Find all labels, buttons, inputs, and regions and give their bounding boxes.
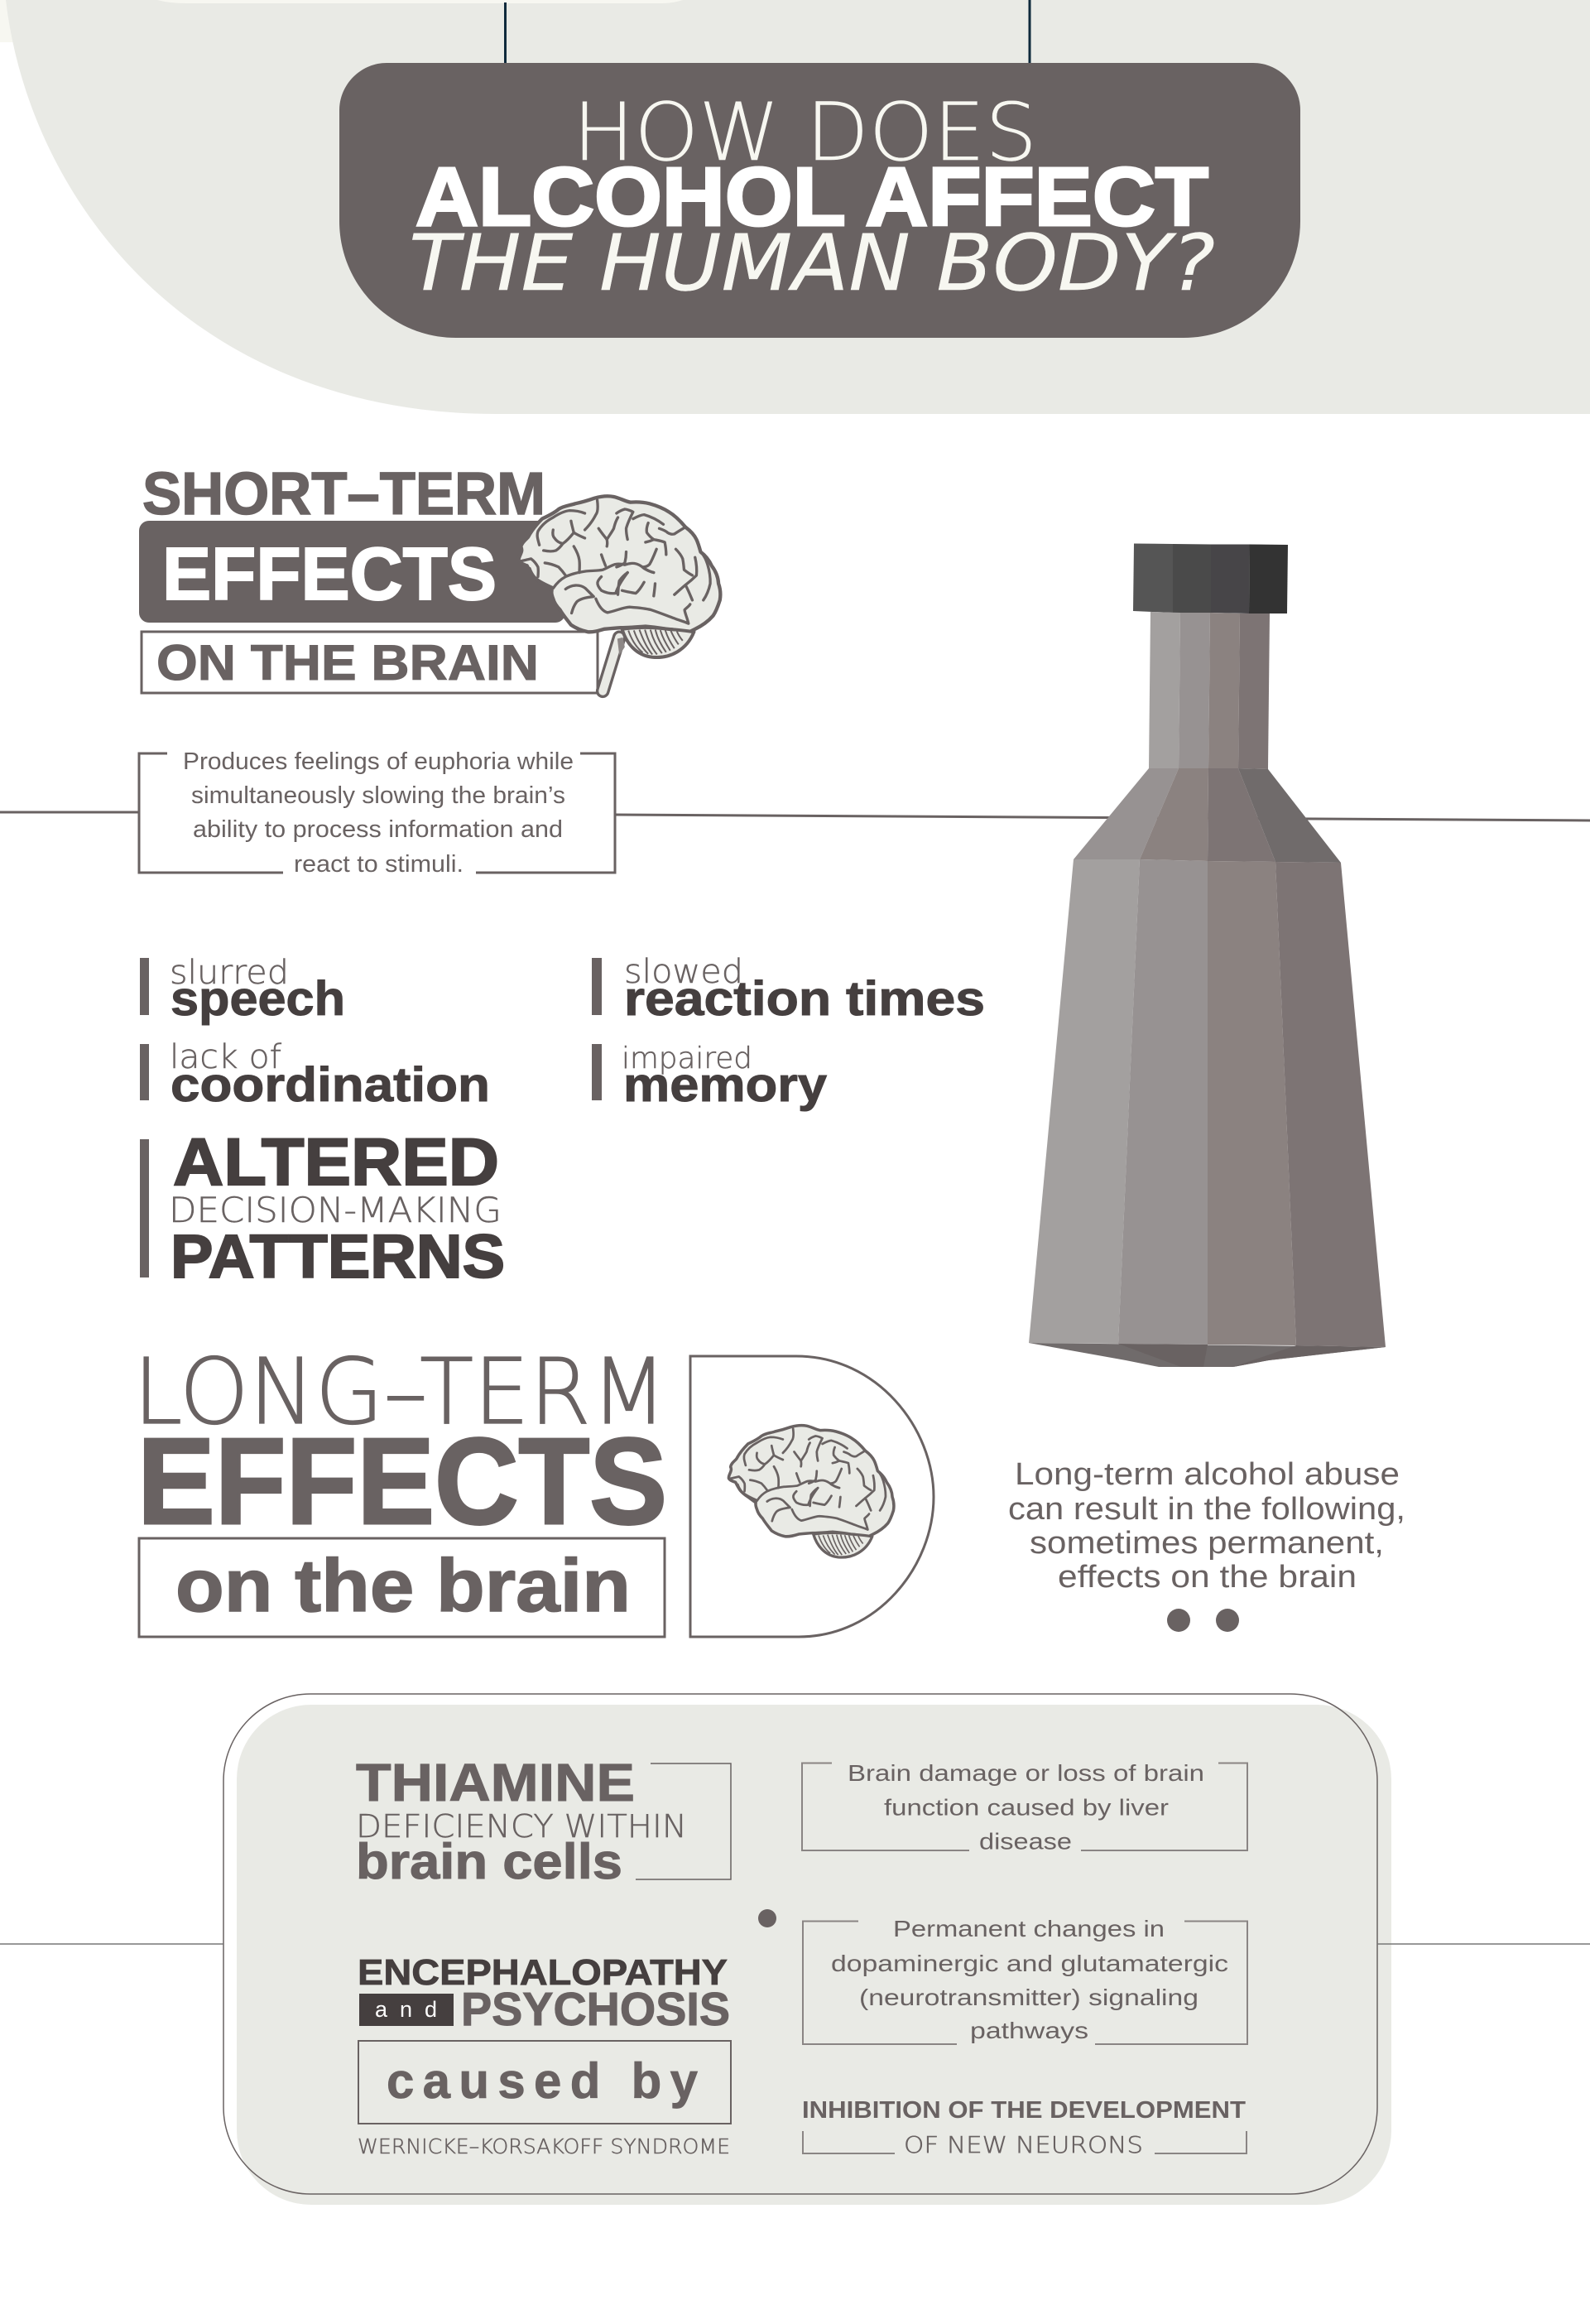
callout: short-term description: Produces feelings of euphoria while	[183, 748, 574, 775]
colon dots	[1167, 1609, 1239, 1632]
hanging strings	[505, 0, 1030, 64]
callout: signaling pathways: Permanent changes in	[893, 1916, 1165, 1941]
title sign	[339, 63, 1300, 338]
thiamine bracket	[636, 1763, 731, 1879]
callout: liver disease	[802, 1760, 1247, 1855]
bottle base	[1029, 1343, 1386, 1367]
effect: lack of coordination: coordination	[171, 1058, 490, 1112]
long-term intro text	[1008, 1457, 1405, 1595]
banner text: effects: EFFECTS	[162, 533, 497, 616]
callout: liver disease: function caused by liver	[884, 1795, 1169, 1820]
thiamine block: DEFICIENCY WITHIN	[356, 1808, 687, 1845]
callout: short-term description: react to stimuli.	[294, 851, 464, 878]
long-term intro text: sometimes permanent,	[1030, 1526, 1384, 1561]
thiamine block	[356, 1753, 687, 1889]
effect: slurred speech: slurred	[170, 954, 289, 992]
heading line: short-term: SHORT–TERM	[142, 461, 545, 527]
encephalopathy and psychosis block: PSYCHOSIS	[461, 1983, 730, 2036]
bottle neck	[1149, 612, 1270, 769]
effect: lack of coordination	[140, 1038, 490, 1112]
bottle body	[1029, 859, 1386, 1347]
long-term intro text: Long-term alcohol abuse	[1015, 1457, 1400, 1492]
callout: signaling pathways: pathways	[970, 2018, 1088, 2043]
bottle cap	[1133, 543, 1288, 613]
center dot	[758, 1909, 776, 1927]
D-shaped brain frame	[690, 1356, 934, 1637]
horizontal divider behind the bottle	[0, 812, 1590, 820]
title line 3: THE HUMAN BODY?	[409, 219, 1215, 309]
outlined box	[139, 1538, 665, 1637]
panel: long-term effects	[223, 1694, 1391, 2205]
title line 1: HOW DOES	[573, 86, 1037, 179]
effect: slurred speech	[140, 954, 345, 1026]
effect: slowed reaction times: reaction times	[624, 972, 985, 1026]
syndrome label: WERNICKE–KORSAKOFF SYNDROME	[358, 2134, 730, 2158]
effects banner	[139, 521, 565, 623]
callout: signaling pathways: (neurotransmitter) signaling	[859, 1985, 1199, 2010]
effect: altered decision-making patterns: ALTERED	[173, 1125, 499, 1200]
icon: large brain	[519, 496, 720, 691]
thiamine block: THIAMINE	[356, 1753, 635, 1812]
panel fill	[237, 1705, 1391, 2205]
bottle shoulder	[1074, 768, 1341, 863]
title line 2: ALCOHOL AFFECT	[416, 151, 1208, 243]
connector lines beside bottom panel	[0, 1943, 1590, 1945]
callout: liver disease: Brain damage or loss of brain	[848, 1760, 1204, 1786]
header background shape	[6, 0, 1590, 414]
callout: short-term description	[139, 748, 615, 878]
encephalopathy and psychosis block: a n d	[375, 1997, 437, 2022]
box text: on the brain: ON THE BRAIN	[156, 635, 539, 690]
effect: altered decision-making patterns: DECISION-MAKING	[169, 1190, 502, 1230]
icon: small brain	[728, 1426, 894, 1557]
top-left lighter sliver	[0, 0, 17, 42]
callout: liver disease: disease	[979, 1828, 1072, 1855]
effect: slowed reaction times	[592, 953, 985, 1026]
heading: long-term effects on the brain	[133, 1339, 667, 1637]
effect: altered decision-making patterns: PATTERNS	[171, 1222, 505, 1291]
callout: short-term description: simultaneously slowing the brain’s	[191, 782, 565, 809]
callout: signaling pathways	[803, 1916, 1247, 2044]
top edge lighter tab	[157, 0, 683, 3]
thiamine block: brain cells	[356, 1834, 622, 1889]
caused by box: caused by	[387, 2053, 699, 2109]
heading: short-term effects on the brain	[139, 461, 598, 693]
callout: signaling pathways: dopaminergic and glutamatergic	[831, 1951, 1228, 1976]
heading line: long-term: LONG–TERM	[133, 1339, 667, 1445]
inhibition of new neurons: INHIBITION OF THE DEVELOPMENT	[802, 2097, 1246, 2124]
box text: on the brain: on the brain	[175, 1545, 631, 1628]
encephalopathy and psychosis block	[358, 1952, 730, 2036]
inhibition of new neurons: OF NEW NEURONS	[904, 2131, 1143, 2158]
bottle illustration	[1029, 543, 1386, 1367]
effect: impaired memory: impaired	[622, 1042, 752, 1075]
effect: impaired memory	[592, 1042, 827, 1112]
effect: slowed reaction times: slowed	[624, 953, 743, 991]
effect: slurred speech: speech	[171, 972, 345, 1026]
heading line: effects: EFFECTS	[137, 1413, 667, 1550]
inhibition of new neurons	[802, 2097, 1247, 2158]
long-term intro text: effects on the brain	[1058, 1560, 1357, 1595]
outlined box	[142, 632, 598, 693]
panel outline	[223, 1694, 1377, 2194]
caused by box	[358, 2041, 731, 2124]
long-term intro text: can result in the following,	[1008, 1492, 1405, 1527]
callout: short-term description: ability to process information and	[193, 816, 563, 843]
effect: lack of coordination: lack of	[170, 1038, 281, 1076]
encephalopathy and psychosis block: ENCEPHALOPATHY	[358, 1952, 728, 1993]
effect: altered decision-making patterns	[140, 1125, 505, 1291]
effect: impaired memory: memory	[623, 1058, 827, 1112]
